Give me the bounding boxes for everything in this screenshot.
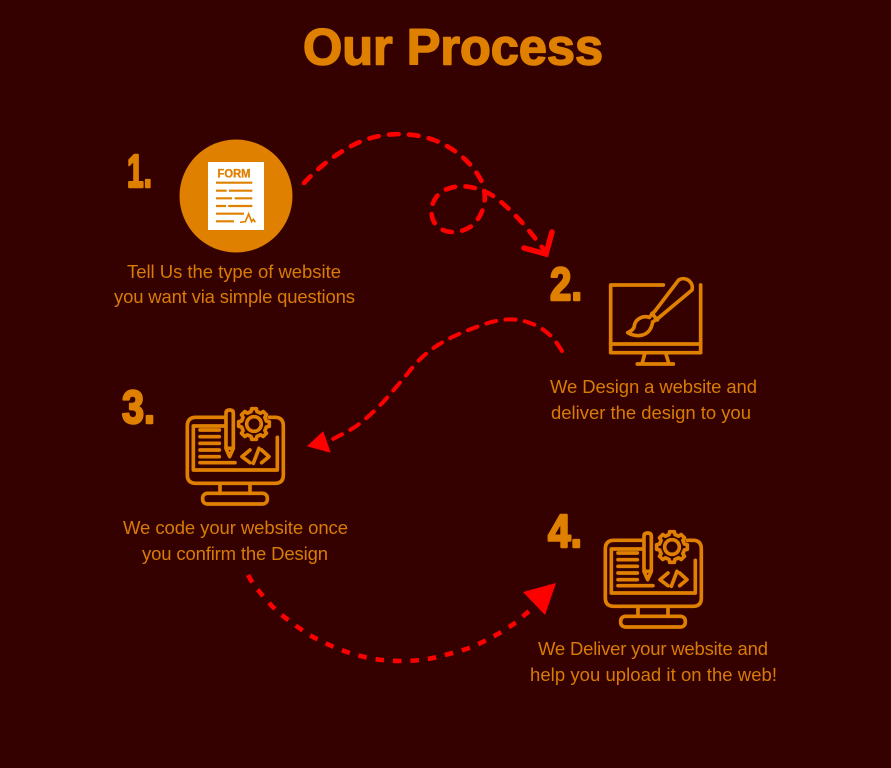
step 3	[122, 381, 348, 564]
step 4 description	[530, 638, 777, 685]
step 1 description: you want via simple questions	[114, 286, 355, 307]
step 3 description	[123, 517, 348, 564]
step 1 description: Tell Us the type of website	[127, 261, 341, 282]
arrow: step 2 to step 3	[308, 319, 562, 452]
step 2 number: 2.	[550, 258, 582, 310]
step 2 description: deliver the design to you	[551, 402, 751, 423]
icon: monitor with code and gear	[187, 409, 283, 504]
icon: form in orange circle	[180, 140, 292, 252]
step 3 description: We code your website once	[123, 517, 348, 538]
step 2 description	[550, 376, 757, 423]
arrow: step 1 to step 2	[304, 134, 552, 254]
step 1	[114, 140, 355, 307]
step 4 description: help you upload it on the web!	[530, 664, 777, 685]
step 3 description: you confirm the Design	[142, 543, 328, 564]
icon: monitor with paintbrush	[611, 279, 701, 364]
step 1 number: 1.	[127, 145, 152, 197]
step 3 number: 3.	[122, 381, 155, 433]
icon: form in orange circle: FORM	[218, 168, 250, 180]
arrow: step 3 to step 4	[248, 575, 556, 661]
step 4	[530, 505, 777, 685]
step 4 description: We Deliver your website and	[538, 638, 768, 659]
icon: monitor with code and gear	[605, 532, 701, 627]
title: Our Process	[303, 18, 603, 76]
step 4 number: 4.	[548, 505, 582, 557]
step 2 description: We Design a website and	[550, 376, 757, 397]
step 1 description	[114, 261, 355, 307]
step 2	[550, 258, 757, 423]
